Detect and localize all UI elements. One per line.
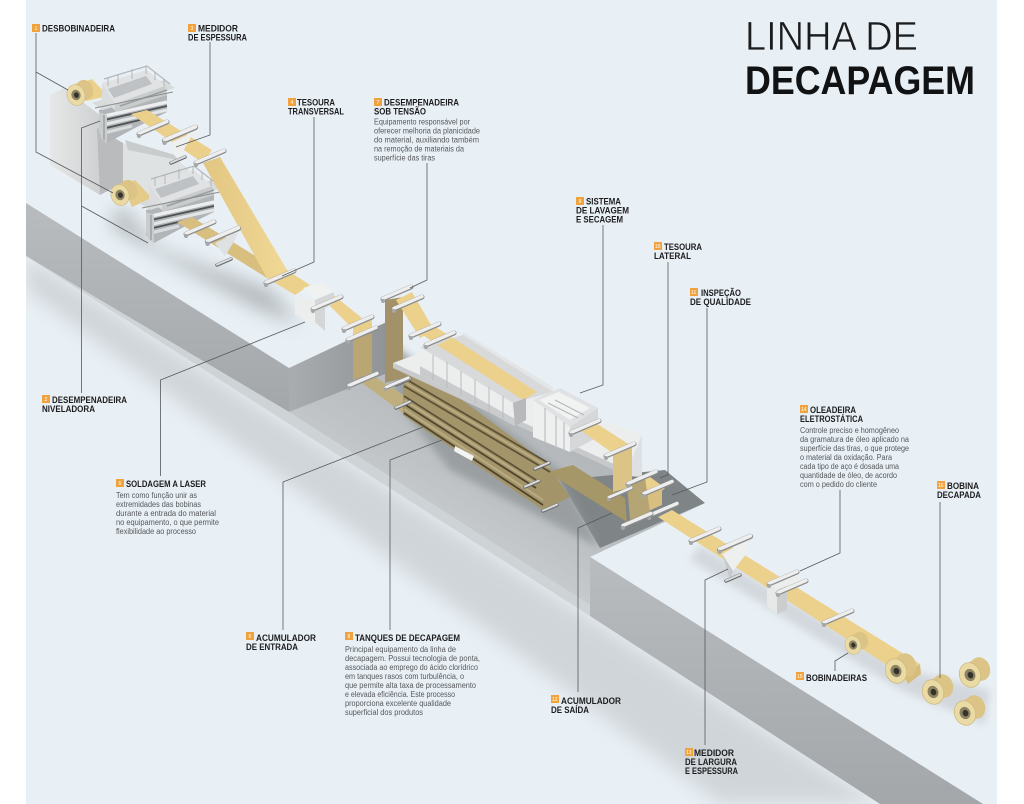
label 7 desempenadeira sob tensão: SOB TENSÃO	[374, 106, 426, 118]
label 13 medidor de largura e espessura: E ESPESSURA	[685, 766, 738, 777]
tall block	[50, 88, 190, 205]
right slab top surface	[590, 503, 705, 577]
strip: upper run	[131, 110, 212, 163]
label 4 tesoura transversal: TRANSVERSAL	[288, 106, 344, 118]
strip: to welder	[267, 270, 310, 295]
icon: uncoiler coils	[64, 77, 140, 208]
label 6 acumulador de entrada: DE ENTRADA	[246, 642, 298, 653]
shadow on right floor	[690, 545, 990, 725]
label 12 acumulador de saída	[551, 695, 621, 716]
label 5 soldagem a laser: no equipamento, o que permite	[116, 518, 220, 527]
label 14 oleadeira eletrostática: da gramatura de óleo aplicado na	[800, 435, 909, 444]
label 6 acumulador de entrada: ACUMULADOR	[256, 633, 316, 644]
label 5 soldagem a laser: Tem como função unir as	[116, 491, 197, 500]
label 8 tanques de decapagem	[345, 632, 480, 717]
label 5 soldagem a laser: extremidades das bobinas	[116, 500, 201, 509]
label 8 tanques de decapagem: superficial dos produtos	[345, 708, 423, 717]
label 14 oleadeira eletrostática: 14	[801, 407, 807, 413]
label 8 tanques de decapagem: TANQUES DE DECAPAGEM	[355, 633, 460, 644]
label 16 bobina decapada: BOBINA	[947, 481, 979, 492]
leader lines	[36, 33, 940, 745]
label 12 acumulador de saída: ACUMULADOR	[561, 696, 621, 707]
drying box	[533, 388, 598, 427]
label 11 inspeção de qualidade	[690, 288, 751, 308]
label 14 oleadeira eletrostática: cada tipo de aço é dosada uma	[800, 462, 899, 471]
label 10 tesoura lateral: 10	[655, 244, 661, 250]
strip: lower entry	[122, 180, 152, 207]
label 13 medidor de largura e espessura: MEDIDOR	[694, 748, 734, 759]
icon: machine, upper uncoiler line	[92, 66, 175, 143]
ledge band	[26, 256, 590, 616]
label 13 medidor de largura e espessura	[685, 748, 738, 777]
label 2 desempenadeira niveladora: NIVELADORA	[42, 404, 95, 415]
icon: machine, lower uncoiler line	[139, 166, 222, 243]
label 8 tanques de decapagem: proporciona excelente qualidade	[345, 699, 452, 708]
label 5 soldagem a laser: flexibilidade ao processo	[116, 527, 197, 536]
label 14 oleadeira eletrostática: quantidade de óleo, de acordo	[800, 471, 897, 480]
label 9 sistema de lavagem e secagem: SISTEMA	[586, 196, 621, 208]
oiler box	[767, 572, 802, 592]
strip: lower run	[177, 217, 275, 278]
label 8 tanques de decapagem: e elevada eficiência. Este processo	[345, 690, 455, 699]
pit floor	[289, 370, 705, 605]
icon: recoiler coils	[842, 629, 920, 686]
label 11 inspeção de qualidade: 11	[691, 290, 697, 296]
label 12 acumulador de saída: DE SAÍDA	[551, 705, 589, 716]
label 7 desempenadeira sob tensão: oferecer melhoria da planicidade	[374, 126, 480, 136]
label 9 sistema de lavagem e secagem: 9	[578, 199, 582, 205]
label 14 oleadeira eletrostática: OLEADEIRA	[810, 405, 856, 416]
label 10 tesoura lateral: LATERAL	[654, 251, 691, 262]
label 3 medidor de espessura: DE ESPESSURA	[188, 32, 247, 44]
label 7 desempenadeira sob tensão: DESEMPENADEIRA	[384, 98, 459, 108]
exit strip and accumulator	[580, 422, 921, 684]
label 15 bobinadeiras	[796, 672, 867, 684]
dark pit shadow	[560, 470, 705, 548]
label 3 medidor de espessura: MEDIDOR	[198, 24, 238, 34]
label 1 desbobinadeira: DESBOBINADEIRA	[42, 24, 115, 34]
rollers	[137, 121, 852, 627]
label 12 acumulador de saída: 12	[552, 697, 558, 703]
strip: entry accumulator	[353, 320, 372, 337]
label 8 tanques de decapagem: 8	[348, 634, 350, 640]
label 1 desbobinadeira: 1	[34, 26, 38, 32]
label 7 desempenadeira sob tensão: 7	[376, 100, 380, 106]
upper slab front face	[26, 203, 289, 412]
label 13 medidor de largura e espessura: 13	[686, 750, 692, 756]
label 8 tanques de decapagem: Principal equipamento da linha de	[345, 645, 457, 654]
label 3 medidor de espessura: 3	[190, 26, 194, 32]
label 14 oleadeira eletrostática: o material da oxidação. Para	[800, 453, 892, 462]
end of line equipment	[722, 541, 802, 614]
label 16 bobina decapada	[937, 481, 981, 501]
washing and drying system	[420, 332, 598, 452]
title: DECAPAGEM	[745, 59, 975, 103]
label 9 sistema de lavagem e secagem: E SECAGEM	[576, 214, 623, 226]
label 14 oleadeira eletrostática: superfície das tiras, o que protege	[800, 444, 909, 453]
label 4 tesoura transversal	[288, 98, 344, 118]
label 11 inspeção de qualidade: INSPEÇÃO	[701, 288, 741, 299]
label 7 desempenadeira sob tensão: superfície das tiras	[374, 154, 435, 162]
strip: incline	[203, 157, 287, 278]
strip: top entry	[75, 79, 108, 101]
title	[745, 13, 975, 103]
label 8 tanques de decapagem: em tanques rasos com turbulência, o	[345, 672, 464, 681]
title: LINHA DE	[745, 13, 918, 59]
label 15 bobinadeiras: 15	[797, 674, 803, 680]
label 10 tesoura lateral	[654, 242, 702, 262]
laser welder box	[295, 283, 341, 331]
label 7 desempenadeira sob tensão	[374, 98, 480, 162]
label 15 bobinadeiras: BOBINADEIRAS	[806, 673, 867, 684]
label 14 oleadeira eletrostática: Controle preciso e homogêneo	[800, 426, 899, 435]
label 4 tesoura transversal: TESOURA	[297, 98, 335, 108]
label 2 desempenadeira niveladora: 2	[44, 397, 48, 403]
label 2 desempenadeira niveladora: DESEMPENADEIRA	[52, 395, 127, 406]
label 6 acumulador de entrada	[246, 632, 316, 653]
lower floor shadow	[26, 256, 880, 804]
label 8 tanques de decapagem: decapagem. Possui tecnologia de ponta,	[345, 654, 480, 663]
label 6 acumulador de entrada: 6	[248, 634, 252, 640]
icon: finished coils	[919, 654, 994, 728]
label 13 medidor de largura e espessura: DE LARGURA	[685, 757, 737, 768]
white platform	[393, 353, 642, 477]
label 7 desempenadeira sob tensão: Equipamento responsável por	[374, 118, 470, 126]
label 2 desempenadeira niveladora	[42, 395, 127, 415]
label 3 medidor de espessura	[188, 24, 247, 44]
pit end wall	[289, 322, 385, 412]
soft machine shadow on upper slab	[110, 205, 300, 325]
steel strip line	[131, 110, 453, 440]
label 10 tesoura lateral: TESOURA	[664, 242, 702, 253]
label 14 oleadeira eletrostática: com o pedido do cliente	[800, 480, 878, 489]
label 5 soldagem a laser	[116, 479, 220, 536]
pickling tanks	[396, 372, 627, 522]
label 16 bobina decapada: DECAPADA	[937, 490, 981, 501]
label 5 soldagem a laser: durante a entrada do material	[116, 509, 216, 518]
right slab face	[590, 557, 983, 804]
label 7 desempenadeira sob tensão: do material, auxiliando também	[374, 136, 479, 144]
label 5 soldagem a laser: SOLDAGEM A LASER	[126, 479, 206, 490]
label 8 tanques de decapagem: associada ao emprego do ácido clorídrico	[345, 663, 478, 672]
label 9 sistema de lavagem e secagem	[576, 196, 629, 226]
label 7 desempenadeira sob tensão: na remoção de materiais da	[374, 144, 464, 154]
label 11 inspeção de qualidade: DE QUALIDADE	[690, 297, 751, 308]
label 16 bobina decapada: 16	[938, 483, 944, 489]
label 8 tanques de decapagem: que permite alta taxa de processamento	[345, 681, 477, 690]
label 9 sistema de lavagem e secagem: DE LAVAGEM	[576, 206, 629, 216]
label 4 tesoura transversal: 4	[290, 100, 294, 106]
label 14 oleadeira eletrostática	[800, 405, 909, 489]
label 5 soldagem a laser: 5	[118, 481, 122, 487]
label 14 oleadeira eletrostática: ELETROSTÁTICA	[800, 414, 863, 425]
